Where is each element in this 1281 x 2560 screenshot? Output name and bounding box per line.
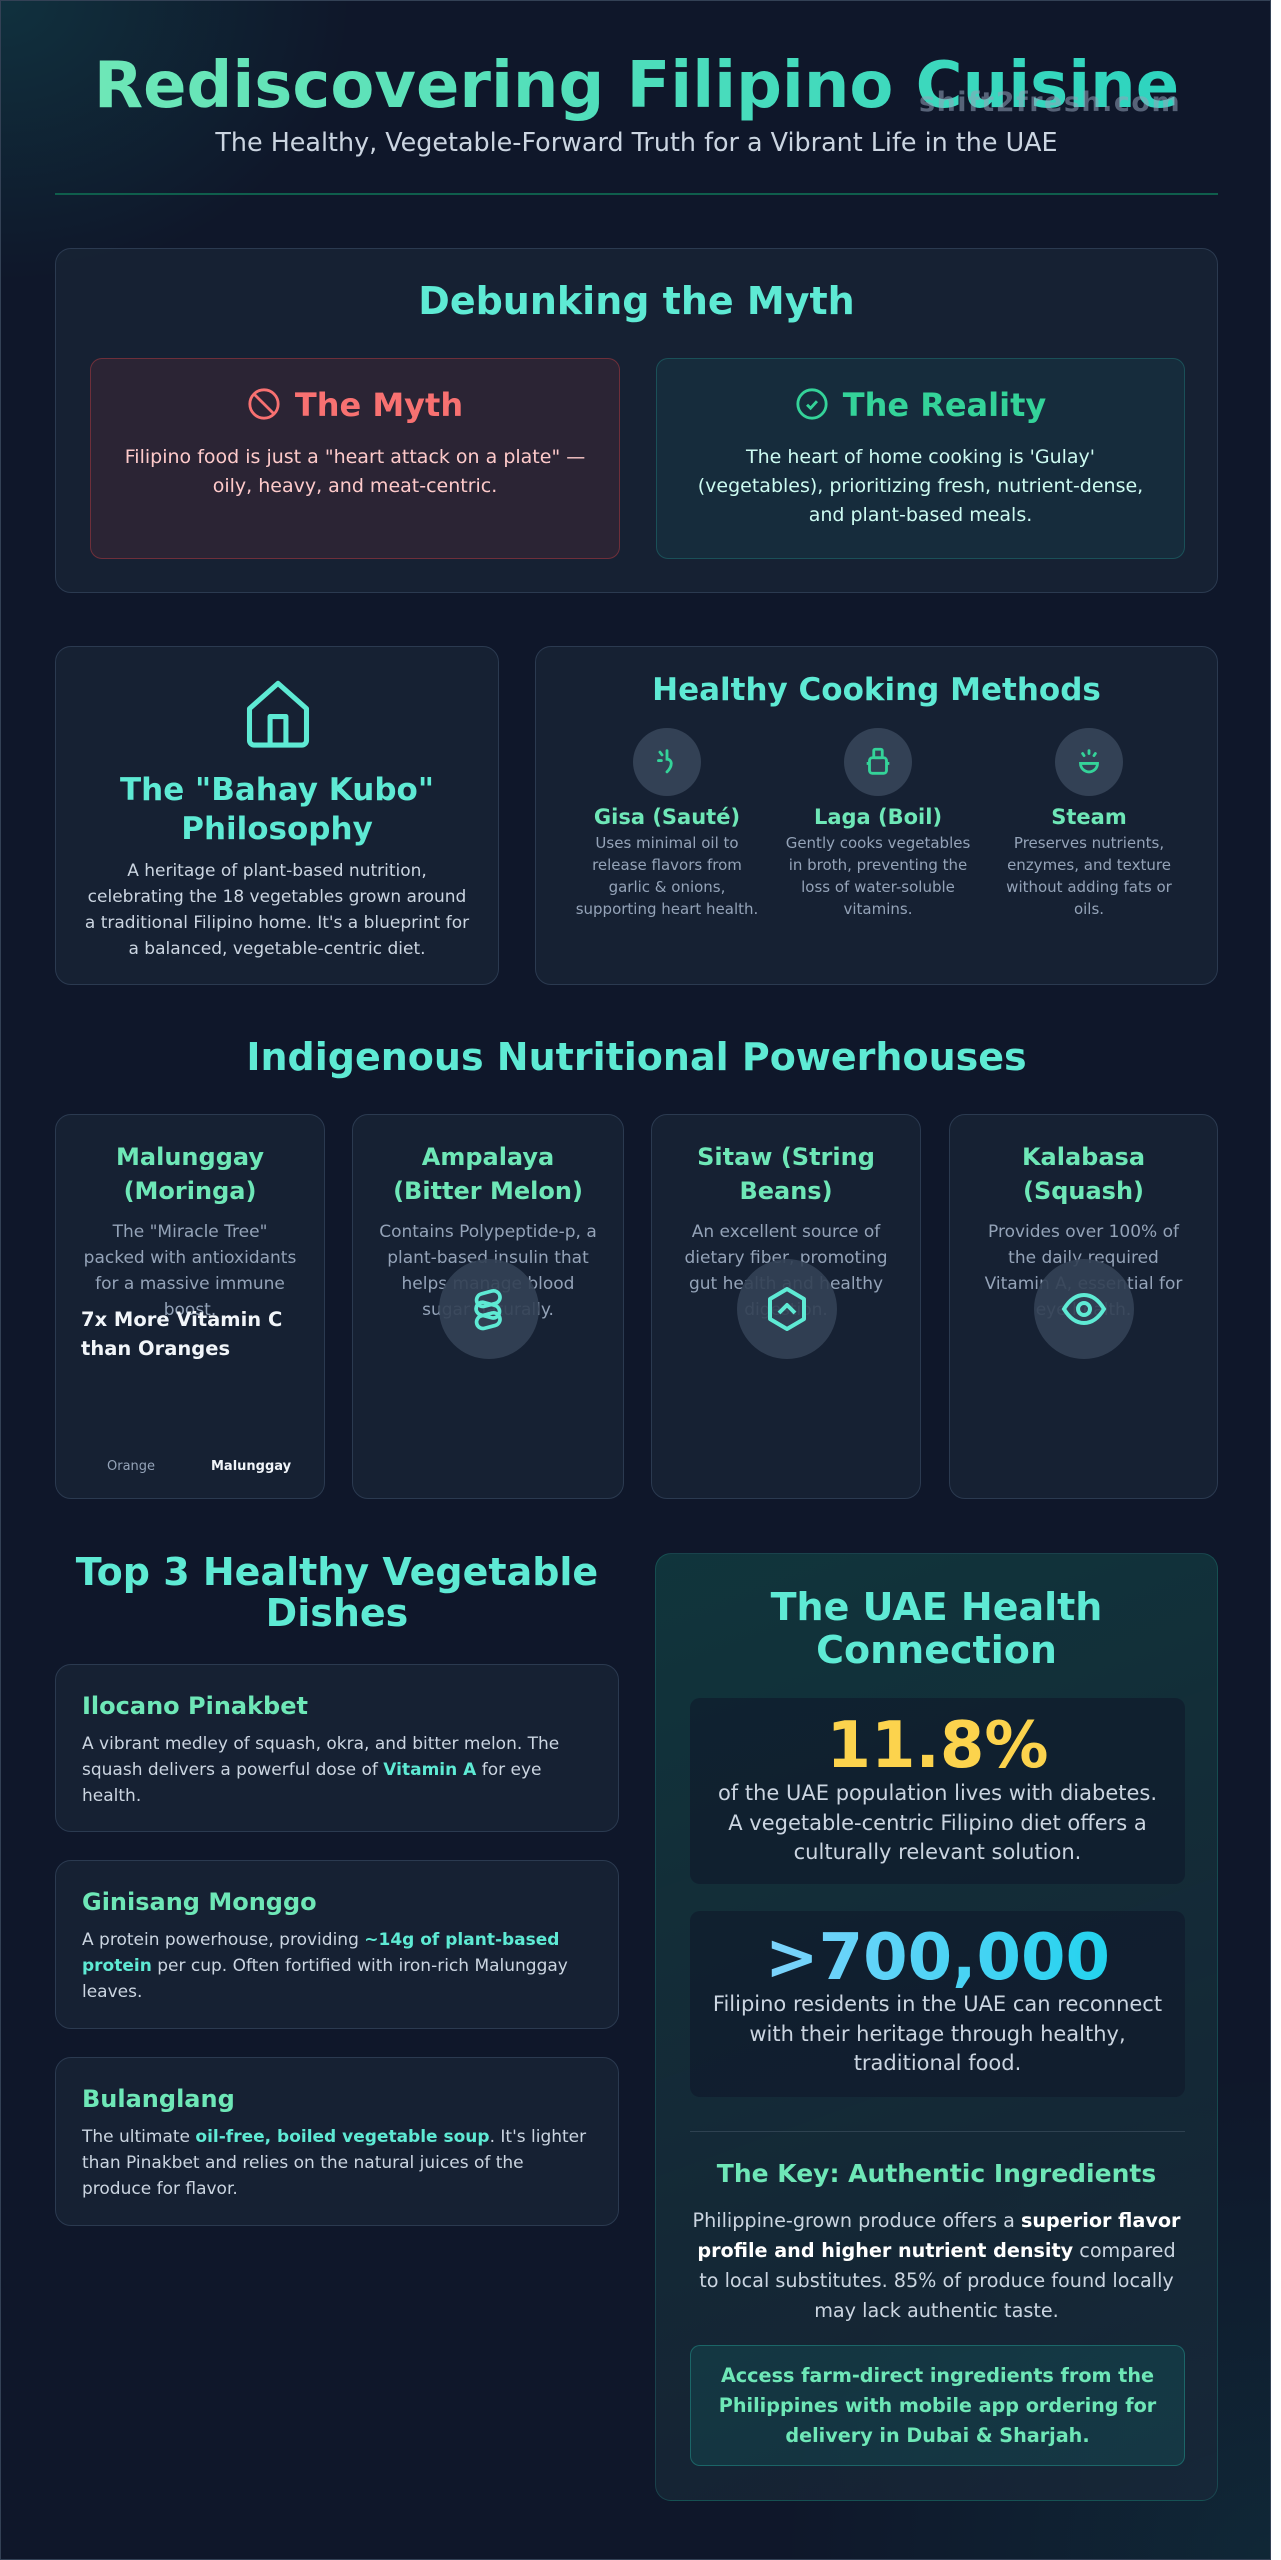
card: sitaw: Sitaw (String Beans) [697,1143,875,1205]
dish: pinakbet: A vibrant medley of squash, okra, and bitter melon. The squash delivers a powerful dose of Vitamin A for eye health. [82,1734,559,1806]
icon: saute [633,728,701,796]
stat: filipino residents: >700,000 [765,1921,1110,1995]
myth title with icon: The Myth [295,386,463,424]
panel: bahay kubo [55,646,499,985]
callout: vitamin c: 7x More Vitamin C [81,1308,282,1331]
card: malunggay: The "Miracle Tree" packed with antioxidants for a massive immune boost. [84,1222,296,1320]
method: laga: Gently cooks vegetables in broth, preventing the loss of water-soluble vitamins. [786,834,970,918]
heading: debunking: Debunking the Myth [418,279,855,323]
callout: vitamin c: than Oranges [81,1337,230,1360]
icon: pills [439,1259,539,1359]
key text: Philippine-grown produce offers a superior flavor profile and higher nutrient density compared to local substitutes. 85% of produce found locally may lack authentic taste. [693,2209,1180,2322]
card: ampalaya [352,1114,624,1499]
watermark: shift2fresh.com [919,87,1181,118]
heading: indigenous powerhouses: Indigenous Nutritional Powerhouses [246,1035,1027,1079]
method: gisa: Uses minimal oil to release flavors from garlic & onions, supporting heart health. [576,834,758,918]
reality title with icon: The Reality [843,386,1046,424]
dish: monggo [55,1860,619,2029]
chart labels: Malunggay [211,1459,291,1474]
method: steam: Preserves nutrients, enzymes, and texture without adding fats or oils. [1006,834,1172,918]
card: kalabasa: Kalabasa (Squash) [1022,1143,1145,1205]
myth text: Filipino food is just a "heart attack on a plate" — oily, heavy, and meat-centric. [125,446,585,497]
subtitle: The Healthy, Vegetable-Forward Truth for a Vibrant Life in the UAE [215,127,1058,157]
method: laga [786,728,970,918]
card: sitaw: An excellent source of dietary fiber, promoting gut health and healthy digestion. [684,1222,888,1320]
stat: diabetes [690,1698,1185,1884]
heading: cooking methods: Healthy Cooking Methods [652,672,1101,708]
myth box [90,358,620,559]
stat: diabetes: of the UAE population lives with diabetes. A vegetable-centric Filipino diet offers a culturally relevant solution. [718,1781,1157,1864]
callout: cta: Access farm-direct ingredients from the Philippines with mobile app ordering for delivery in Dubai & Sharjah. [719,2364,1156,2447]
dish: monggo: Ginisang Monggo [82,1888,317,1916]
method: laga: Laga (Boil) [814,805,942,829]
dish: bulanglang [55,2057,619,2226]
stat: diabetes: 11.8% [826,1709,1049,1783]
bahay kubo text: A heritage of plant-based nutrition, celebrating the 18 vegetables grown around a traditional Filipino home. It's a blueprint for a balanced, vegetable-centric diet. [85,861,469,959]
method: gisa: Gisa (Sauté) [594,805,740,829]
reality box [656,358,1185,559]
card: malunggay: Malunggay (Moringa) [116,1143,264,1205]
stat: filipino residents [690,1911,1185,2097]
reality text: The heart of home cooking is 'Gulay' (vegetables), prioritizing fresh, nutrient-dense, and plant-based meals. [698,446,1143,526]
icon: steam bowl [1055,728,1123,796]
icon: hexagon [737,1259,837,1359]
card: ampalaya: Ampalaya (Bitter Melon) [393,1143,583,1205]
dish: bulanglang: The ultimate oil-free, boiled vegetable soup. It's lighter than Pinakbet and relies on the natural juices of the produce for flavor. [82,2127,586,2199]
dish: pinakbet: Ilocano Pinakbet [82,1692,308,1720]
card: kalabasa [949,1114,1218,1499]
panel: debunking the myth [55,248,1218,593]
method: steam [1006,728,1172,918]
method: steam: Steam [1051,805,1127,829]
callout: cta [690,2345,1185,2466]
dish: monggo: A protein powerhouse, providing ~14g of plant-based protein per cup. Often fortified with iron-rich Malunggay leaves. [82,1930,568,2002]
stat: filipino residents: Filipino residents in the UAE can reconnect with their heritage through healthy, traditional food. [713,1992,1162,2075]
card: sitaw [651,1114,921,1499]
card: kalabasa: Provides over 100% of the daily required Vitamin A, essential for eye health. [985,1222,1182,1320]
key heading: The Key: Authentic Ingredients [717,2159,1156,2188]
heading: uae: The UAE Health Connection [771,1585,1102,1672]
icon: pot [844,728,912,796]
icon: house [246,680,310,748]
panel: uae health connection [655,1553,1218,2501]
dish: bulanglang: Bulanglang [82,2085,235,2113]
bahay kubo title: The "Bahay Kubo" Philosophy [120,772,434,847]
chart labels: Orange [107,1459,155,1474]
heading: top 3 dishes: Top 3 Healthy Vegetable Dishes [76,1550,598,1635]
panel: cooking methods [535,646,1218,985]
card: ampalaya: Contains Polypeptide-p, a plant-based insulin that helps manage blood sugar naturally. [379,1222,597,1320]
method: gisa [576,728,758,918]
title: Rediscovering Filipino Cuisine [94,49,1179,123]
icon: eye [1034,1259,1134,1359]
chart labels [107,1459,291,1474]
card: malunggay [55,1114,325,1499]
callout: vitamin c [81,1308,282,1360]
dish: pinakbet [55,1664,619,1832]
